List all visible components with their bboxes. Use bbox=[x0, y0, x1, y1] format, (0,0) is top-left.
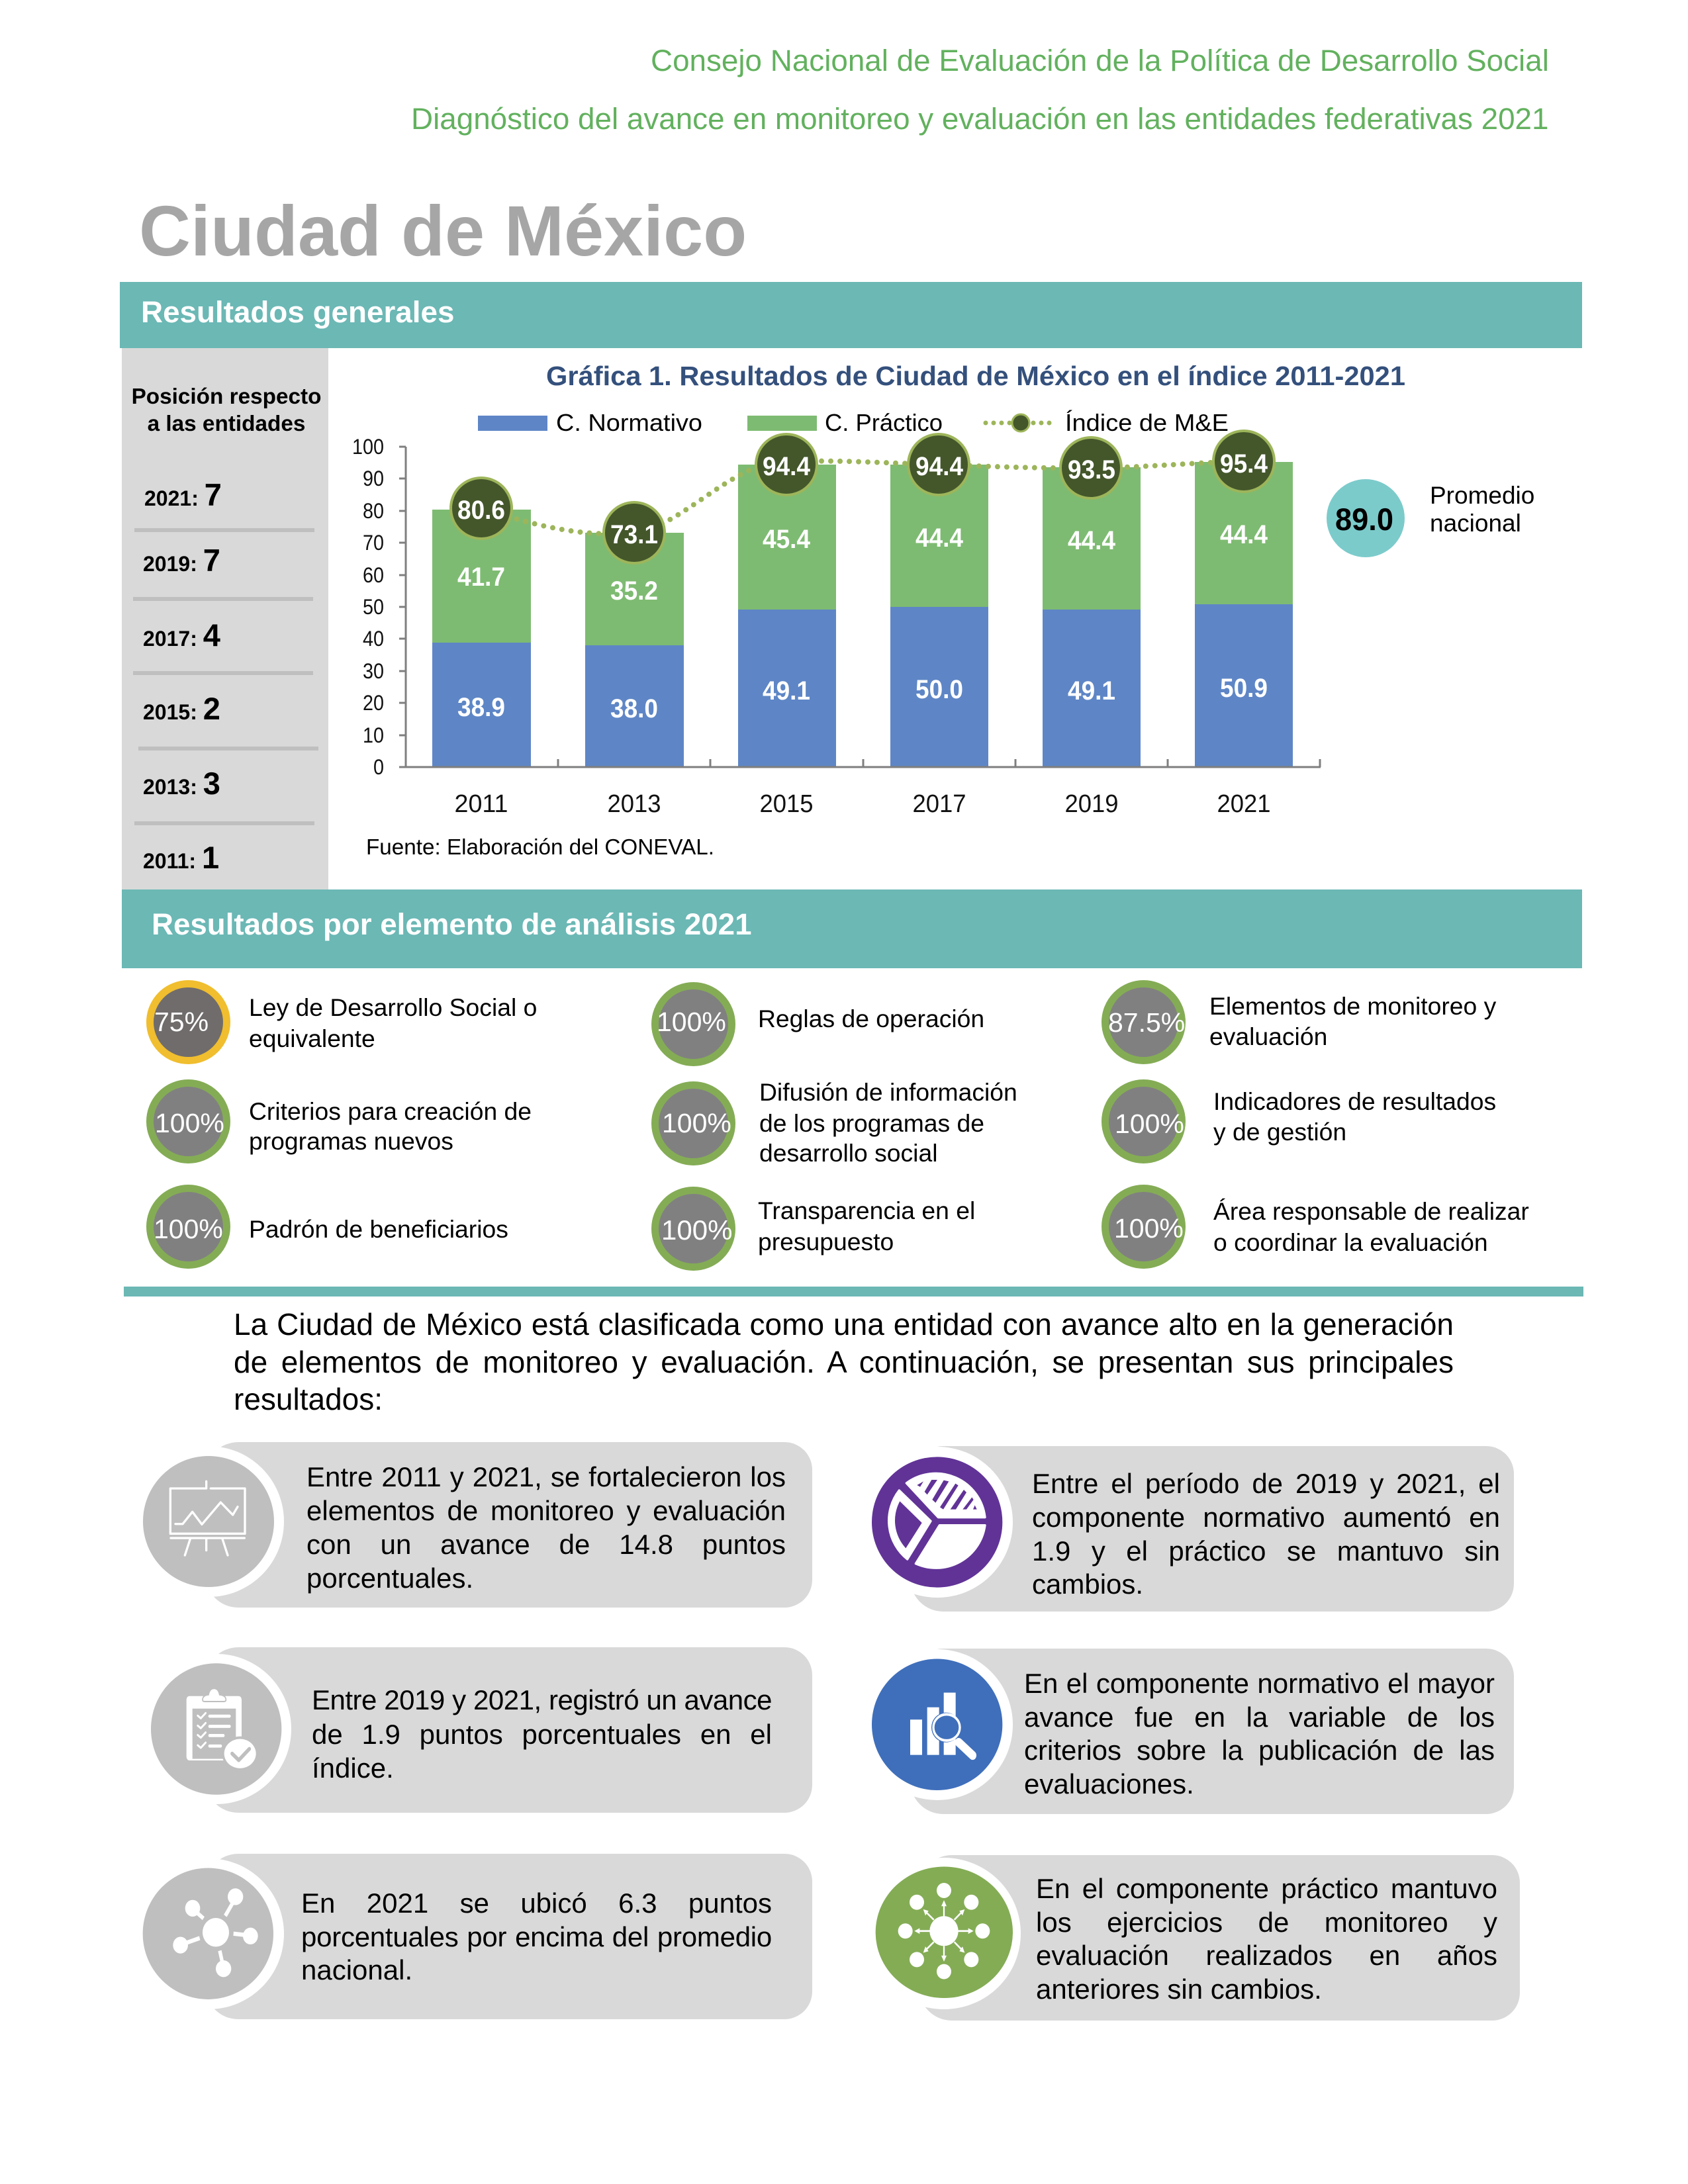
position 2011: 2011: 1 bbox=[143, 840, 219, 875]
x axis labels: 2017 bbox=[912, 790, 966, 818]
x axis labels: 2011 bbox=[454, 790, 508, 818]
position 2021: 2021: 7 bbox=[144, 477, 222, 512]
card text: Entre el período de 2019 y 2021, el bbox=[1032, 1468, 1500, 1499]
item: criterios: programas nuevos bbox=[249, 1127, 453, 1155]
data labels: 80.6 bbox=[457, 496, 505, 525]
item: elementos de monitoreo: Elementos de monitoreo y bbox=[1209, 992, 1496, 1020]
data labels: 44.4 bbox=[1068, 526, 1116, 555]
card: 6.3 puntos sobre el promedio bbox=[143, 1854, 812, 2019]
item: criterios bbox=[146, 1079, 532, 1163]
bars: C. Práctico bbox=[432, 462, 1293, 645]
intro paragraph: de elementos de monitoreo y evaluación. A continuación, se presentan sus principales bbox=[234, 1345, 1454, 1379]
data labels bbox=[457, 449, 1268, 723]
panel: posición respecto a las entidades: a las entidades bbox=[148, 412, 305, 436]
data labels: 45.4 bbox=[763, 525, 811, 554]
position 2019: 2019: 7 bbox=[143, 543, 220, 578]
item: reglas de operación: Reglas de operación bbox=[758, 1005, 984, 1032]
data labels: 35.2 bbox=[610, 576, 658, 606]
y axis labels: 100 bbox=[352, 435, 384, 459]
item: transparencia: Transparencia en el bbox=[758, 1197, 975, 1224]
item: elementos de monitoreo: evaluación bbox=[1209, 1023, 1327, 1050]
item: difusión: de los programas de bbox=[759, 1109, 984, 1137]
legend: Índice de M&E bbox=[1065, 409, 1229, 436]
data labels: 50.0 bbox=[915, 675, 963, 704]
source note: Fuente: Elaboración del CONEVAL. bbox=[366, 835, 714, 859]
data labels: 41.7 bbox=[457, 563, 505, 592]
item: padrón bbox=[146, 1185, 508, 1269]
item: difusión: Difusión de información bbox=[759, 1078, 1017, 1106]
index markers bbox=[451, 431, 1274, 563]
data labels: 94.4 bbox=[915, 452, 964, 481]
item: indicadores: 100% bbox=[1115, 1109, 1184, 1139]
position 2013: 2013: 3 bbox=[143, 766, 220, 801]
data labels: 94.4 bbox=[763, 452, 811, 481]
item: criterios: Criterios para creación de bbox=[249, 1097, 532, 1125]
item: área responsable: o coordinar la evaluación bbox=[1213, 1228, 1488, 1256]
intro paragraph: resultados: bbox=[234, 1382, 383, 1416]
item: ley de desarrollo social: Ley de Desarrollo Social o bbox=[249, 993, 537, 1021]
card: período 2019-2021 bbox=[872, 1446, 1514, 1612]
data labels: 44.4 bbox=[1220, 520, 1268, 549]
data labels: 49.1 bbox=[1068, 676, 1115, 705]
section heading: resultados por elemento: Resultados por elemento de análisis 2021 bbox=[152, 907, 751, 941]
card: componente normativo: criterios sobre la publicación de las bbox=[1024, 1735, 1495, 1766]
item: indicadores: y de gestión bbox=[1213, 1118, 1346, 1146]
axes bbox=[399, 447, 1321, 767]
y axis labels: 90 bbox=[363, 467, 384, 490]
item: área responsable bbox=[1102, 1185, 1529, 1269]
data labels: 49.1 bbox=[763, 676, 810, 705]
card: componente práctico bbox=[875, 1855, 1520, 2021]
data labels: 38.9 bbox=[457, 693, 505, 722]
y axis labels: 0 bbox=[373, 755, 384, 779]
item: ley de desarrollo social: 75% bbox=[154, 1007, 209, 1037]
card: avance 14.8 puntos bbox=[143, 1442, 812, 1608]
national average: 89.0 bbox=[1335, 502, 1393, 537]
card: período 2019-2021: cambios. bbox=[1032, 1569, 1143, 1600]
header: organisation: Consejo Nacional de Evaluación de la Política de Desarrollo Social bbox=[651, 44, 1549, 77]
card text: En 2021 se ubicó 6.3 puntos bbox=[301, 1888, 772, 1919]
panel: posición respecto a las entidades bbox=[122, 348, 328, 889]
y axis labels: 50 bbox=[363, 595, 384, 619]
y axis labels: 30 bbox=[363, 659, 384, 683]
national average: Promedio bbox=[1430, 482, 1534, 509]
x axis labels bbox=[454, 790, 1271, 818]
section heading: resultados generales: Resultados generales bbox=[141, 295, 454, 329]
item: difusión: desarrollo social bbox=[759, 1139, 937, 1167]
x axis labels: 2015 bbox=[760, 790, 813, 818]
x axis labels: 2021 bbox=[1217, 790, 1271, 818]
card: período 2019-2021: 1.9 y el práctico se mantuvo sin bbox=[1032, 1535, 1500, 1567]
item: transparencia: 100% bbox=[661, 1214, 732, 1246]
data labels: 50.9 bbox=[1220, 674, 1268, 703]
data labels: 38.0 bbox=[610, 694, 658, 723]
card: avance 14.8 puntos: porcentuales. bbox=[306, 1563, 473, 1594]
item: padrón: 100% bbox=[154, 1214, 223, 1244]
y axis labels: 70 bbox=[363, 531, 384, 555]
card: componente normativo: evaluaciones. bbox=[1024, 1768, 1194, 1799]
item: criterios: 100% bbox=[155, 1108, 224, 1138]
national average bbox=[1327, 479, 1534, 557]
chart title: Gráfica 1. Resultados de Ciudad de México en el índice 2011-2021 bbox=[546, 361, 1405, 391]
item: indicadores bbox=[1102, 1079, 1496, 1163]
legend bbox=[478, 409, 1229, 436]
card: componente normativo bbox=[872, 1649, 1514, 1814]
national average: nacional bbox=[1430, 510, 1521, 537]
y axis labels: 60 bbox=[363, 563, 384, 587]
item: transparencia bbox=[651, 1187, 975, 1271]
y axis labels: 40 bbox=[363, 627, 384, 651]
card text: Entre 2011 y 2021, se fortalecieron los bbox=[306, 1461, 786, 1492]
item: área responsable: 100% bbox=[1114, 1213, 1184, 1244]
item: indicadores: Indicadores de resultados bbox=[1213, 1087, 1496, 1115]
y axis labels bbox=[352, 435, 384, 779]
x axis labels: 2013 bbox=[608, 790, 661, 818]
card: componente práctico: evaluación realizados en años bbox=[1036, 1940, 1497, 1971]
card: 1.9 puntos porcentuales bbox=[151, 1647, 812, 1813]
data labels: 44.4 bbox=[915, 523, 964, 553]
card: componente práctico: los ejercicios de monitoreo y bbox=[1036, 1907, 1497, 1938]
data labels: 93.5 bbox=[1068, 455, 1115, 484]
card text: En el componente práctico mantuvo bbox=[1036, 1873, 1497, 1904]
chart: resultados en el índice 2011-2021 bbox=[352, 361, 1534, 859]
title: Ciudad de México bbox=[139, 191, 747, 271]
y axis labels: 10 bbox=[363, 723, 384, 747]
item: transparencia: presupuesto bbox=[758, 1228, 894, 1255]
legend: C. Práctico bbox=[825, 409, 943, 436]
y axis labels: 20 bbox=[363, 691, 384, 715]
section heading: resultados generales bbox=[120, 282, 1582, 348]
data labels: 95.4 bbox=[1220, 449, 1268, 478]
line: índice de M&E bbox=[481, 461, 1244, 534]
y axis labels: 80 bbox=[363, 499, 384, 523]
card: 6.3 puntos sobre el promedio: porcentuales por encima del promedio bbox=[301, 1921, 772, 1952]
card: 6.3 puntos sobre el promedio: nacional. bbox=[301, 1954, 412, 1985]
legend: C. Normativo bbox=[556, 409, 702, 436]
item: área responsable: Área responsable de realizar bbox=[1213, 1197, 1529, 1225]
header: report title: Diagnóstico del avance en monitoreo y evaluación en las entidades federativas 2021 bbox=[411, 102, 1549, 136]
bars: C. Normativo bbox=[432, 604, 1293, 767]
data labels: 73.1 bbox=[610, 520, 658, 549]
intro paragraph: La Ciudad de México está clasificada como una entidad con avance alto en la generación bbox=[234, 1307, 1454, 1342]
item: elementos de monitoreo bbox=[1102, 980, 1496, 1064]
section heading: resultados por elemento bbox=[122, 889, 1582, 968]
intro paragraph bbox=[234, 1307, 1454, 1416]
position 2015: 2015: 2 bbox=[143, 691, 220, 726]
card: 1.9 puntos porcentuales: de 1.9 puntos porcentuales en el bbox=[312, 1719, 772, 1750]
x axis labels: 2019 bbox=[1064, 790, 1119, 818]
card: 1.9 puntos porcentuales: índice. bbox=[312, 1752, 394, 1784]
item: reglas de operación bbox=[651, 982, 984, 1066]
item: padrón: Padrón de beneficiarios bbox=[249, 1215, 508, 1243]
sidebar heading: Posición respecto bbox=[132, 385, 321, 409]
card text: Entre 2019 y 2021, registró un avance bbox=[312, 1684, 772, 1715]
item: reglas de operación: 100% bbox=[657, 1007, 726, 1037]
card: período 2019-2021: componente normativo aumentó en bbox=[1032, 1502, 1500, 1533]
card: avance 14.8 puntos: elementos de monitoreo y evaluación bbox=[306, 1495, 786, 1526]
item: ley de desarrollo social bbox=[146, 980, 537, 1064]
card: componente normativo: avance fue en la variable de los bbox=[1024, 1702, 1495, 1733]
card: componente práctico: anteriores sin cambios. bbox=[1036, 1974, 1322, 2005]
card text: En el componente normativo el mayor bbox=[1024, 1668, 1495, 1699]
item: difusión bbox=[651, 1078, 1017, 1167]
position 2017: 2017: 4 bbox=[143, 617, 220, 653]
item: difusión: 100% bbox=[662, 1108, 731, 1138]
item: elementos de monitoreo: 87.5% bbox=[1108, 1007, 1185, 1038]
card: avance 14.8 puntos: con un avance de 14.8 puntos bbox=[306, 1529, 786, 1560]
item: ley de desarrollo social: equivalente bbox=[249, 1024, 375, 1052]
